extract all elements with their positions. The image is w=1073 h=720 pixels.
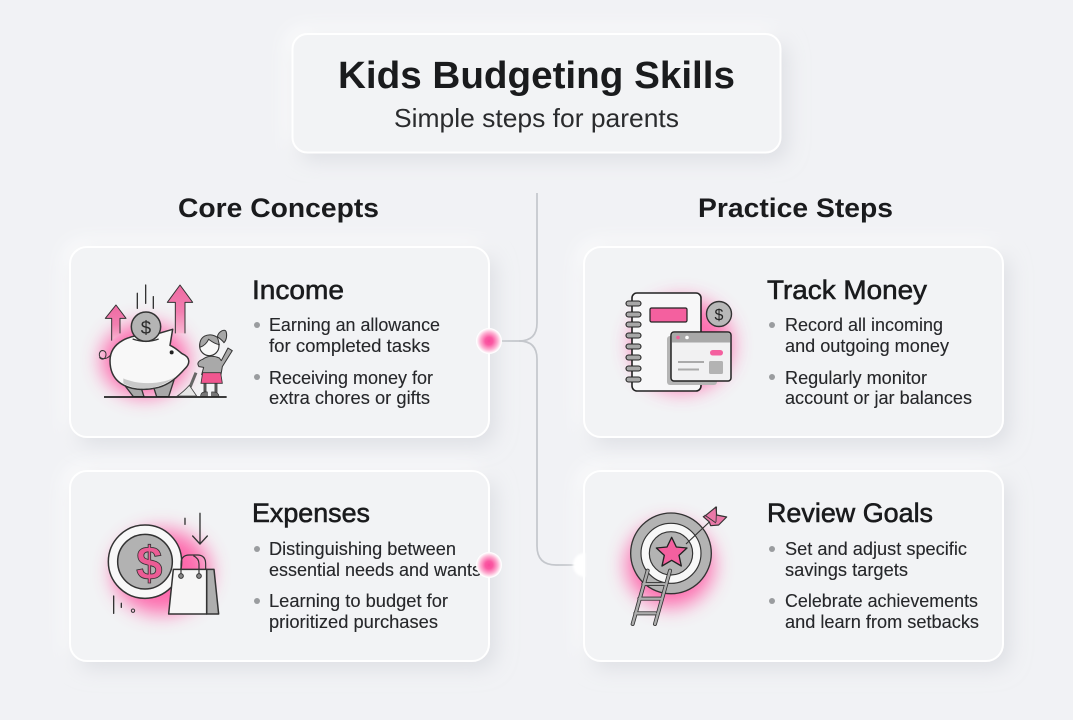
icon: notebook and window [626,293,732,391]
panel: review goals [584,471,1003,661]
bullet list: expenses [254,539,481,632]
bullet list: income: for completed tasks [269,336,430,356]
icon: target with star and ladder [627,507,727,624]
heading: review goals: Review Goals [767,498,933,528]
icon: notebook and window: $ [715,307,724,324]
subtitle: Simple steps for parents [394,103,679,133]
connector node: income [476,328,502,354]
panel: track money [584,247,1003,437]
title panel [292,34,780,152]
heading: income: Income [252,275,344,305]
bullet list: track money: Record all incoming [785,315,943,335]
bullet list: track money: and outgoing money [785,336,949,356]
bullet list: income [254,315,440,408]
bullet list: review goals: Celebrate achievements [785,591,978,611]
bullet list: track money: Regularly monitor [785,368,927,388]
bullet list: income: extra chores or gifts [269,388,430,408]
bullet list: income: Earning an allowance [269,315,440,335]
connector node: expenses [476,552,502,578]
bullet list: expenses: essential needs and wants [269,560,481,580]
heading: core concepts: Core Concepts [178,193,379,223]
bullet list: review goals: savings targets [785,560,908,580]
icon: coin and shopping bag [108,513,219,614]
bullet list: review goals: and learn from setbacks [785,612,979,632]
heading: practice steps: Practice Steps [698,193,893,223]
heading: expenses: Expenses [252,498,370,528]
bullet list: expenses: prioritized purchases [269,612,438,632]
icon: piggy bank and child [99,285,232,397]
bullet list: expenses: Learning to budget for [269,591,448,611]
connector lines [495,193,578,565]
bullet list: expenses: Distinguishing between [269,539,456,559]
icon: child [177,330,232,396]
bullet list: track money [769,315,972,408]
icon: coin and shopping bag: $ [136,537,162,590]
bullet list: review goals: Set and adjust specific [785,539,967,559]
panel: expenses [70,471,489,661]
bullet list: review goals [769,539,979,632]
panel: income [70,247,489,437]
connector node: review goals [573,553,585,577]
title: Kids Budgeting Skills [338,55,735,97]
bullet list: income: Receiving money for [269,368,433,388]
icon: piggy bank and child: $ [141,317,152,338]
bullet list: track money: account or jar balances [785,388,972,408]
heading: track money: Track Money [767,275,928,305]
